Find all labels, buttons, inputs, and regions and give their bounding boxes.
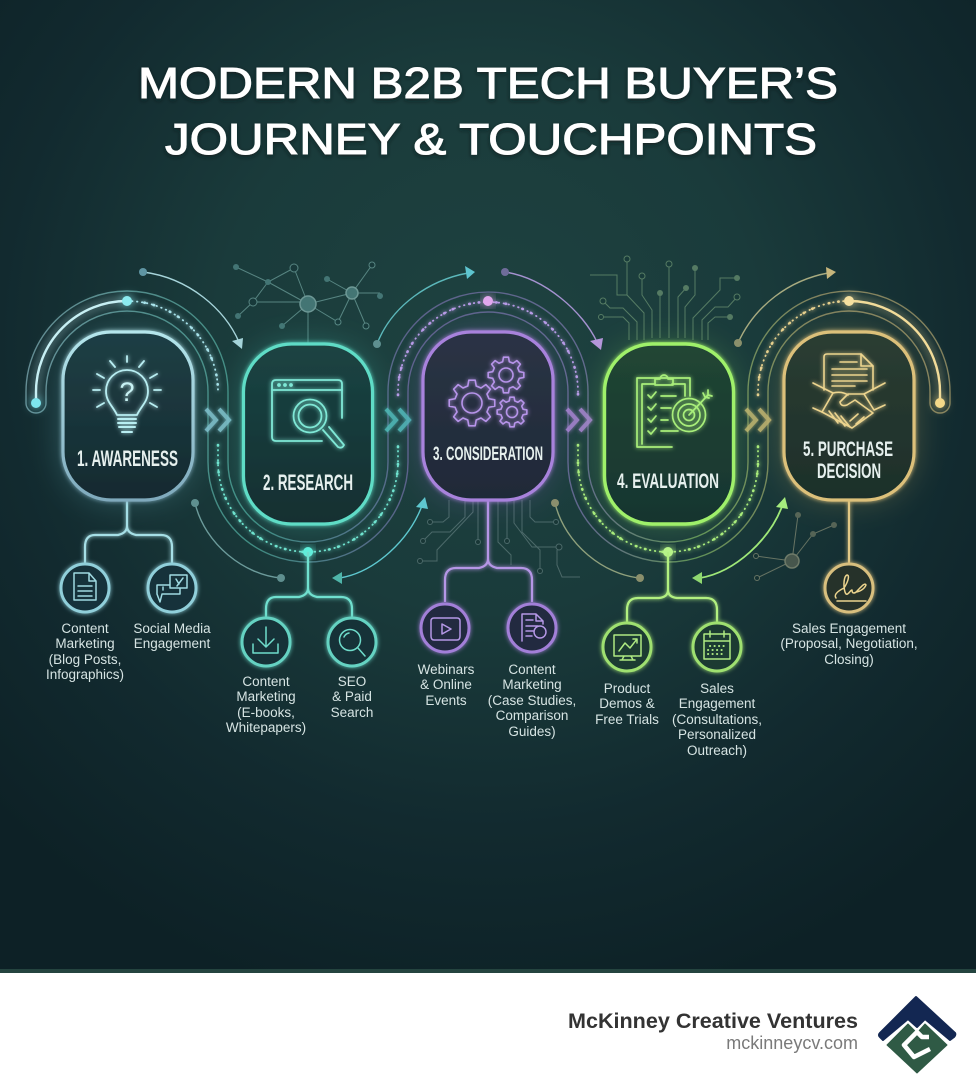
label: 2. RESEARCH — [263, 470, 353, 495]
circuit decoration below consideration — [418, 500, 580, 577]
touchpoint: content marketing ebooks — [226, 618, 306, 735]
text: Marketing — [55, 636, 115, 651]
label: 5. PURCHASE — [803, 438, 893, 461]
text: Product — [604, 681, 651, 696]
branch connectors — [85, 500, 849, 622]
icon: signature — [835, 575, 866, 601]
title — [138, 59, 838, 164]
text: (Proposal, Negotiation, — [780, 636, 918, 651]
text: (E-books, — [237, 705, 295, 720]
logo — [879, 997, 955, 1073]
footer brand text — [568, 1010, 858, 1053]
text: Free Trials — [595, 712, 659, 727]
text: Sales — [700, 681, 734, 696]
label: 4. EVALUATION — [617, 470, 719, 493]
text: Whitepapers) — [226, 720, 306, 735]
touchpoint: sales engagement proposal — [780, 564, 918, 667]
node: research bottom — [303, 547, 313, 557]
text: Content — [61, 621, 109, 636]
node: evaluation bottom — [663, 547, 673, 557]
text: (Blog Posts, — [49, 652, 121, 667]
text: (Case Studies, — [488, 693, 576, 708]
text: Webinars — [418, 662, 475, 677]
circuit decoration above evaluation — [590, 256, 740, 340]
text: Search — [331, 705, 373, 720]
text: Demos & — [599, 696, 655, 711]
title: JOURNEY & TOUCHPOINTS — [165, 115, 817, 164]
panel: 2 research — [244, 344, 372, 524]
node: consideration top — [483, 296, 493, 306]
dotted journey paths — [127, 301, 849, 552]
text: Marketing — [236, 689, 296, 704]
text: Events — [425, 693, 467, 708]
icon: contract and handshake — [813, 354, 885, 428]
thin curved arrows top — [139, 266, 836, 350]
icon: download — [253, 627, 278, 653]
icon: lightbulb with question mark: ? — [119, 377, 135, 407]
icon: video player — [431, 618, 460, 640]
title: MODERN B2B TECH BUYER’S — [138, 59, 838, 108]
network decoration below purchase — [754, 512, 837, 580]
white footer — [0, 973, 976, 1088]
text: Closing) — [824, 652, 874, 667]
bright start arc with nodes — [31, 296, 132, 408]
card glow halos — [62, 332, 915, 524]
network decoration above research — [233, 262, 383, 344]
text: Marketing — [502, 677, 562, 692]
panel: 5 purchase decision — [784, 332, 914, 500]
icon: magnifier — [340, 630, 365, 656]
touchpoint: content marketing blog — [46, 564, 124, 682]
text: (Consultations, — [672, 712, 762, 727]
icon: monitor chart — [614, 635, 641, 660]
label: 1. AWARENESS — [77, 446, 178, 471]
panel: 3 consideration — [423, 332, 553, 500]
text: Guides) — [508, 724, 556, 739]
label: 3. CONSIDERATION — [433, 444, 543, 465]
text: & Online — [420, 677, 472, 692]
text: Engagement — [134, 636, 211, 651]
text: Infographics) — [46, 667, 124, 682]
touchpoint: product demos — [595, 623, 659, 727]
text: Comparison — [496, 708, 568, 723]
icon: gears — [449, 357, 527, 427]
icon: document — [74, 573, 96, 600]
footer brand text: mckinneycv.com — [726, 1033, 858, 1053]
bright end arc with nodes — [844, 296, 945, 408]
label: DECISION — [817, 460, 881, 483]
text: Social Media — [133, 621, 211, 636]
icon: clipboard with target — [637, 375, 712, 447]
text: Content — [508, 662, 556, 677]
panel: 4 evaluation — [604, 344, 734, 524]
bottom edge band — [0, 969, 976, 973]
calendar dots — [708, 646, 726, 654]
text: Outreach) — [687, 743, 747, 758]
touchpoint: sales consultations — [672, 623, 762, 758]
touchpoint: webinars — [418, 604, 475, 708]
chevrons between stages — [206, 409, 769, 431]
touchpoint: seo and paid search — [328, 618, 376, 720]
icon: lightbulb with question mark — [93, 356, 161, 432]
text: & Paid — [332, 689, 372, 704]
icon: document with magnifier — [522, 614, 546, 641]
icon: speech bubbles — [157, 575, 187, 602]
touchpoint: social media — [133, 564, 211, 651]
icon: calendar — [704, 631, 730, 659]
panel: 1 awareness — [63, 332, 193, 500]
label — [803, 438, 893, 483]
text: Personalized — [678, 727, 756, 742]
icon: browser with magnifier — [272, 380, 344, 448]
text: Content — [242, 674, 290, 689]
serpentine journey tube — [26, 291, 950, 562]
footer brand text: McKinney Creative Ventures — [568, 1010, 858, 1033]
text: SEO — [338, 674, 366, 689]
thin curved arrows bottom — [191, 497, 788, 584]
text: Engagement — [679, 696, 756, 711]
touchpoint: content marketing case studies — [488, 604, 576, 739]
text: Sales Engagement — [792, 621, 906, 636]
